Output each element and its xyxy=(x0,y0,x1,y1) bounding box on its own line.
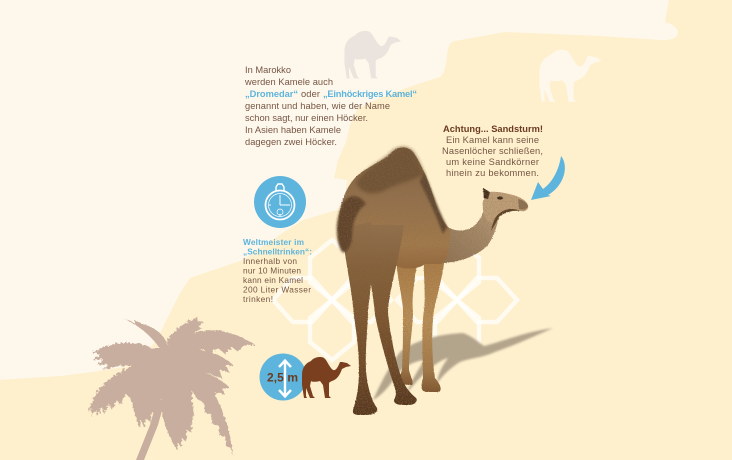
text block: Dromedar: In Asien haben Kamele xyxy=(245,125,341,135)
near rear leg xyxy=(342,222,377,415)
arrow: to nostrils xyxy=(531,156,565,200)
text block: Dromedar: schon sagt, nur einen Höcker. xyxy=(245,113,368,123)
far rear leg xyxy=(396,255,418,385)
camel ground shadow xyxy=(373,328,553,400)
muzzle xyxy=(518,199,528,210)
camel photo xyxy=(337,148,528,415)
near front leg xyxy=(362,225,417,405)
neck xyxy=(439,203,500,263)
text block: Weltmeister: „Schnelltrinken“: xyxy=(243,246,312,256)
far front leg xyxy=(422,250,445,392)
text block: Dromedar: „Dromedar“ xyxy=(245,89,298,99)
text block: Dromedar: „Einhöckriges Kamel“ xyxy=(323,89,417,99)
text block: Weltmeister: Weltmeister im xyxy=(243,237,304,247)
text block: Weltmeister: trinken! xyxy=(243,294,273,304)
camel silhouette: pale cream xyxy=(539,50,602,102)
camel silhouette: pale grey xyxy=(344,31,401,78)
text block: Sandsturm: Nasenlöcher schließen, xyxy=(442,146,543,156)
text block: Dromedar: werden Kamele auch xyxy=(244,77,333,87)
text block: Weltmeister: Innerhalb von xyxy=(243,256,297,266)
chest edge xyxy=(420,172,447,234)
ear xyxy=(483,188,490,199)
arrow: height xyxy=(279,360,291,396)
icon: stopwatch xyxy=(254,176,306,228)
tail xyxy=(337,196,366,252)
text block: Dromedar: In Marokko xyxy=(245,65,291,75)
fur on hump xyxy=(356,148,424,193)
eye xyxy=(497,196,503,200)
text block: Weltmeister xyxy=(243,237,312,304)
body xyxy=(339,148,450,268)
text block: Weltmeister: kann ein Kamel xyxy=(243,275,303,285)
jaw shadow xyxy=(491,209,520,231)
text block: Weltmeister: 200 Liter Wasser xyxy=(243,285,311,295)
palm trunk xyxy=(136,400,165,460)
text block: Sandsturm: um keine Sandkörner xyxy=(446,157,539,167)
text block: Sandsturm: Achtung... Sandsturm! xyxy=(443,124,543,134)
palm tree xyxy=(88,317,255,460)
head xyxy=(483,188,528,223)
text block: Dromedar xyxy=(244,65,417,147)
text block: Dromedar: genannt und haben, wie der Name xyxy=(245,101,390,111)
map: light land area xyxy=(0,0,678,380)
palm fronds xyxy=(88,317,255,457)
text block: Sandsturm: Ein Kamel kann seine xyxy=(446,135,539,145)
text block: Sandsturm xyxy=(442,124,543,178)
text block: Dromedar: oder xyxy=(301,89,320,99)
height comparison xyxy=(260,354,351,400)
icon: small camel xyxy=(302,357,351,398)
text block: Dromedar: dagegen zwei Höcker. xyxy=(245,137,337,147)
text block: Weltmeister: nur 10 Minuten xyxy=(243,266,301,276)
label: height: 2,5 m xyxy=(267,370,298,384)
knot ornament xyxy=(273,240,517,360)
text block: Sandsturm: hinein zu bekommen. xyxy=(446,168,539,178)
